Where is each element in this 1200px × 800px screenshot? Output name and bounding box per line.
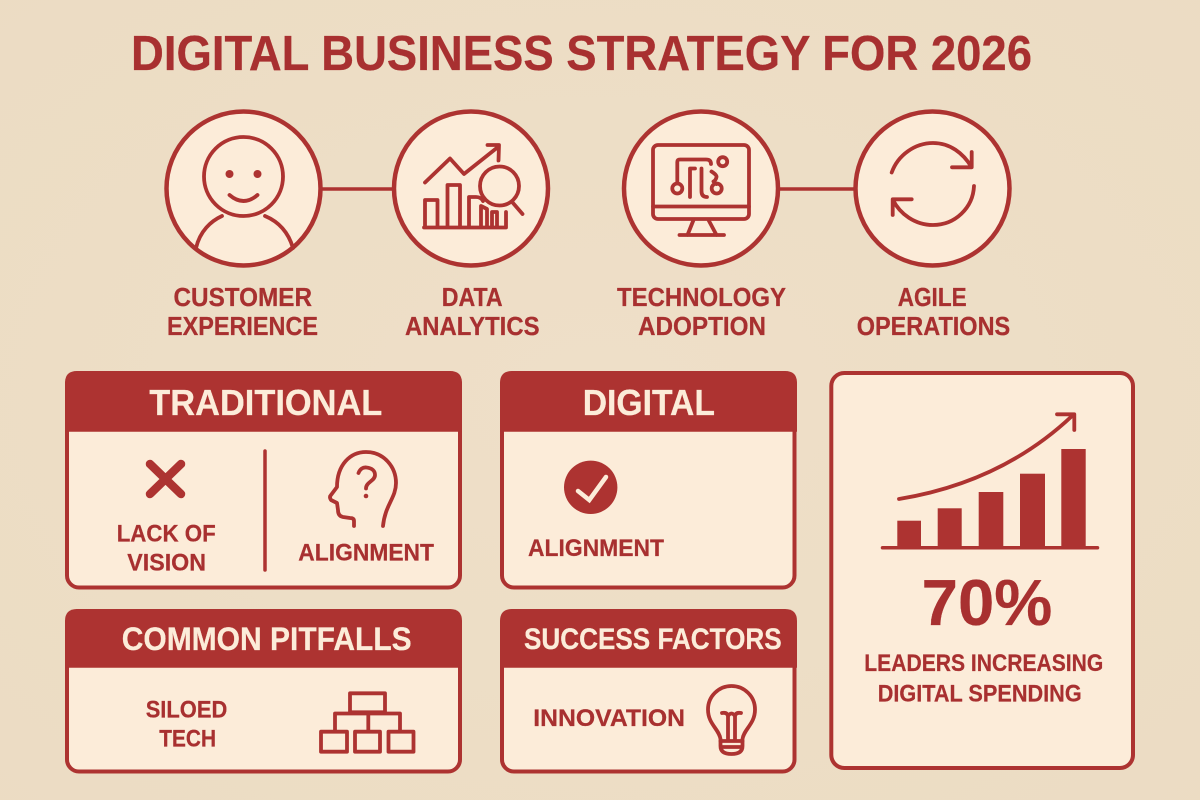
stat caption: LEADERS INCREASING bbox=[864, 650, 1103, 677]
icon: x mark bbox=[150, 464, 181, 494]
header: common pitfalls: COMMON PITFALLS bbox=[122, 621, 412, 657]
title: DIGITAL BUSINESS STRATEGY FOR 2026 bbox=[131, 27, 1032, 81]
label: siloed tech: TECH bbox=[159, 726, 216, 753]
icon: head with question mark bbox=[330, 452, 396, 526]
label: siloed tech bbox=[146, 696, 227, 753]
label: technology adoption: ADOPTION bbox=[638, 313, 766, 341]
connector: customer experience to data analytics bbox=[320, 187, 394, 191]
stat caption bbox=[864, 650, 1103, 708]
label: agile operations bbox=[857, 284, 1010, 341]
icon: monitor with circuit bbox=[624, 112, 778, 266]
chart: rising bars with arrow bbox=[882, 414, 1098, 548]
panel: digital bbox=[500, 371, 797, 588]
header: traditional bbox=[65, 371, 462, 432]
icon: check circle bbox=[564, 461, 617, 514]
pillar: agile operations bbox=[856, 112, 1010, 341]
header: traditional: TRADITIONAL bbox=[149, 382, 382, 423]
label: customer experience bbox=[167, 284, 318, 341]
label: agile operations: OPERATIONS bbox=[857, 313, 1010, 341]
label: customer experience: EXPERIENCE bbox=[167, 313, 318, 341]
label: siloed tech: SILOED bbox=[146, 696, 227, 723]
label: agile operations: AGILE bbox=[898, 284, 967, 312]
label: technology adoption bbox=[617, 284, 786, 341]
label: technology adoption: TECHNOLOGY bbox=[617, 284, 786, 312]
pillar: technology adoption bbox=[617, 112, 786, 341]
pillar: customer experience bbox=[166, 112, 320, 341]
panel: 70 percent stat bbox=[831, 373, 1133, 768]
icon: light bulb bbox=[708, 686, 755, 754]
pillar: data analytics bbox=[394, 112, 548, 341]
label: lack of vision: VISION bbox=[127, 550, 206, 577]
label: innovation: INNOVATION bbox=[533, 705, 685, 732]
icon: hierarchy boxes bbox=[321, 693, 414, 752]
label: lack of vision: LACK OF bbox=[117, 521, 216, 548]
label: alignment: ALIGNMENT bbox=[298, 540, 434, 567]
label: data analytics: DATA bbox=[442, 284, 503, 312]
header: digital: DIGITAL bbox=[583, 382, 715, 423]
header: success factors bbox=[500, 609, 797, 668]
label: data analytics: ANALYTICS bbox=[405, 313, 540, 341]
panel: success factors bbox=[500, 609, 797, 772]
panel: common pitfalls bbox=[65, 609, 462, 772]
panel: traditional bbox=[65, 371, 462, 588]
stat value: 70% bbox=[922, 566, 1052, 639]
stat caption: DIGITAL SPENDING bbox=[878, 681, 1082, 708]
icon: smiling person bbox=[166, 112, 320, 266]
header: success factors: SUCCESS FACTORS bbox=[524, 623, 782, 656]
icon: sync arrows bbox=[856, 112, 1010, 266]
label: data analytics bbox=[405, 284, 540, 341]
connector: technology adoption to agile operations bbox=[778, 187, 855, 191]
label: customer experience: CUSTOMER bbox=[174, 284, 312, 312]
header: common pitfalls bbox=[65, 609, 462, 668]
icon: chart with magnifier bbox=[394, 112, 548, 266]
header: digital bbox=[500, 371, 797, 432]
label: alignment: ALIGNMENT bbox=[528, 535, 664, 562]
label: lack of vision bbox=[117, 521, 216, 577]
